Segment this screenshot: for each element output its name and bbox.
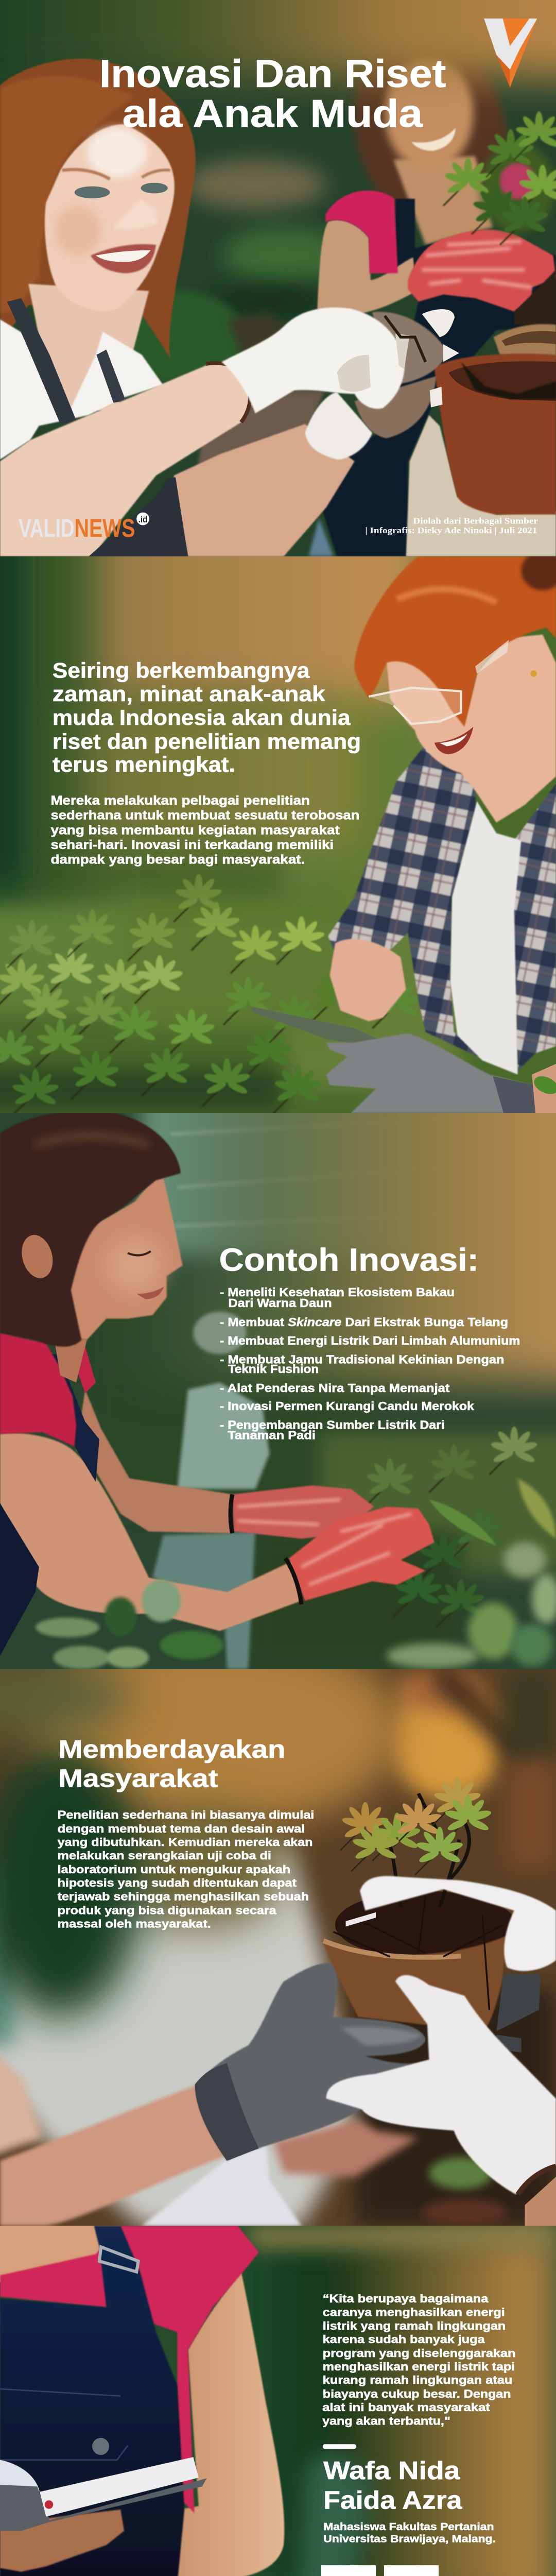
heading: muda Indonesia akan dunia: [53, 706, 351, 730]
body text: [58, 1808, 314, 1930]
quote text: alat ini banyak masyarakat: [322, 2401, 491, 2414]
title: [99, 52, 446, 136]
photo: figure in the background: [294, 2452, 426, 2576]
gradient overlay: green to orange: [107, 1042, 556, 1382]
speaker affiliation: Mahasiswa Fakultas Pertanian: [323, 2521, 494, 2533]
quote text: “Kita berupaya bagaimana: [323, 2292, 489, 2305]
list of innovations: - Meneliti Kesehatan Ekosistem Bakau: [220, 1285, 455, 1299]
logo: VALIDNEWS.id: VALID: [19, 514, 75, 543]
quote text: caranya menghasilkan energi: [323, 2306, 505, 2319]
heading: [59, 1735, 285, 1793]
gradient overlay: green to orange: [0, 1630, 404, 2017]
list of innovations: - Alat Penderas Nira Tanpa Memanjat: [220, 1381, 450, 1395]
speaker affiliation: [323, 2521, 496, 2545]
photo: woman in red shirt: [0, 1111, 301, 1656]
photo: person's arm and shirt: [0, 2084, 419, 2226]
heading: riset dan penelitian memang: [53, 730, 361, 753]
heading: zaman, minat anak-anak: [53, 682, 326, 706]
quote text: program yang diselenggarakan: [323, 2347, 515, 2360]
body text: laboratorium untuk mengukur apakah: [58, 1863, 290, 1876]
photo: seedling: [340, 1777, 492, 1907]
logo: VALIDNEWS.id: .id: [138, 514, 148, 524]
list of innovations: - Membuat Skincare Dari Ekstrak Bunga Telang: [220, 1315, 508, 1329]
photo: red striped gloves: [231, 1485, 435, 1604]
gradient overlay: green to orange: [0, 0, 556, 78]
photo: plant pot: [323, 1891, 541, 2053]
photo: foliage background: [0, 556, 556, 1117]
quote text: yang akan terbantu,": [322, 2414, 450, 2427]
heading: Seiring berkembangnya: [53, 659, 310, 683]
body text: sehari-hari. Inovasi ini terkadang memiliki: [50, 838, 334, 852]
quote text: [322, 2292, 515, 2427]
body text: melakukan serangkaian uji coba di: [58, 1849, 271, 1862]
quote text: listrik yang ramah lingkungan: [323, 2319, 506, 2332]
heading: [53, 659, 361, 776]
list of innovations: Dari Warna Daun: [229, 1296, 332, 1310]
divider bar: [323, 2444, 356, 2449]
list of innovations: - Membuat Energi Listrik Dari Limbah Alumunium: [220, 1334, 520, 1347]
photo: woman with glasses and plaid shirt: [251, 551, 556, 1113]
list of innovations: [220, 1285, 520, 1442]
photo: potted plant held by background woman: [443, 111, 556, 245]
panel: empowering communities: [0, 1669, 556, 2562]
body text: Penelitian sederhana ini biasanya dimulai: [58, 1808, 314, 1821]
list of innovations: Teknik Fushion: [228, 1362, 319, 1376]
body text: produk yang bisa digunakan secara: [58, 1904, 276, 1917]
body text: yang dibutuhkan. Kemudian mereka akan: [58, 1836, 313, 1849]
panel: intro: [0, 556, 556, 1113]
body text: massal oleh masyarakat.: [58, 1917, 211, 1930]
photo: white gloves: [326, 1876, 556, 2226]
list of innovations: - Membuat Jamu Tradisional Kekinian Dengan: [220, 1352, 504, 1366]
source credit: Diolah dari Berbagai Sumber: [413, 516, 538, 526]
photo: second person in the background: [152, 1312, 269, 1669]
heading: terus meningkat.: [53, 753, 235, 776]
panel: quote: [0, 1803, 556, 2576]
body text: dampak yang besar bagi masyarakat.: [50, 853, 305, 867]
title: Inovasi Dan Riset: [99, 52, 446, 96]
body text: sederhana untuk membuat sesuatu terobosan: [50, 808, 359, 822]
icon: closing quotation marks: [321, 2565, 439, 2576]
body text: [50, 794, 359, 867]
quote text: menghasilkan energi listrik tapi: [323, 2360, 515, 2373]
photo: garden background: [0, 0, 556, 556]
speaker name: Wafa Nida: [323, 2456, 460, 2485]
heading: Masyarakat: [59, 1764, 218, 1793]
quote text: biayanya cukup besar. Dengan: [323, 2387, 511, 2400]
heading: Contoh Inovasi:: [219, 1243, 479, 1278]
quote text: kurang ramah lingkungan atau: [323, 2374, 512, 2386]
photo: foreground leaves: [36, 1478, 556, 1669]
photo: grey glove: [195, 1963, 429, 2161]
photo: greenhouse background: [0, 1077, 556, 1669]
source credit: [365, 516, 538, 535]
speaker name: [323, 2456, 462, 2515]
speaker affiliation: Universitas Brawijaya, Malang.: [323, 2533, 496, 2545]
photo: smiling woman with red hair: [0, 59, 355, 556]
logo: VALIDNEWS.id: NEWS: [75, 514, 135, 543]
quote text: karena sudah banyak juga: [323, 2333, 485, 2346]
photo: person with apron and book: [0, 2226, 284, 2576]
list of innovations: - Inovasi Permen Kurangi Candu Merokok: [220, 1399, 474, 1413]
photo: person's light shirt: [0, 1846, 355, 2226]
gradient overlay: green to orange: [0, 485, 426, 904]
photo: blurred background: [0, 1669, 556, 2226]
body text: dengan membuat tema dan desain awal: [58, 1822, 305, 1835]
photo: woman in the background: [308, 42, 556, 556]
list of innovations: - Pengembangan Sumber Listrik Dari: [220, 1418, 445, 1432]
body text: terjawab sehingga menghasilkan sebuah: [58, 1890, 309, 1903]
body text: hipotesis yang sudah ditentukan dapat: [58, 1876, 297, 1889]
logo: VALIDNEWS.id: [19, 513, 149, 543]
photo: terracotta pots and stone ledge: [406, 324, 556, 556]
title: ala Anak Muda: [123, 92, 423, 136]
panel: cover: [0, 0, 556, 556]
photo: white gloves with small pot: [221, 308, 459, 460]
body text: Mereka melakukan pelbagai penelitian: [50, 794, 310, 808]
list of innovations: Tanaman Padi: [228, 1429, 316, 1442]
heading: Memberdayakan: [59, 1735, 285, 1764]
icon: V logo: [484, 19, 537, 87]
panel: innovation examples: [0, 1007, 556, 2562]
photo: blurred garden background: [0, 2226, 556, 2576]
speaker name: Faida Azra: [323, 2486, 462, 2515]
body text: yang bisa membantu kegiatan masyarakat: [50, 823, 340, 837]
source credit: | Infografis: Dieky Ade Ninoki | Juli 2021: [365, 526, 537, 535]
